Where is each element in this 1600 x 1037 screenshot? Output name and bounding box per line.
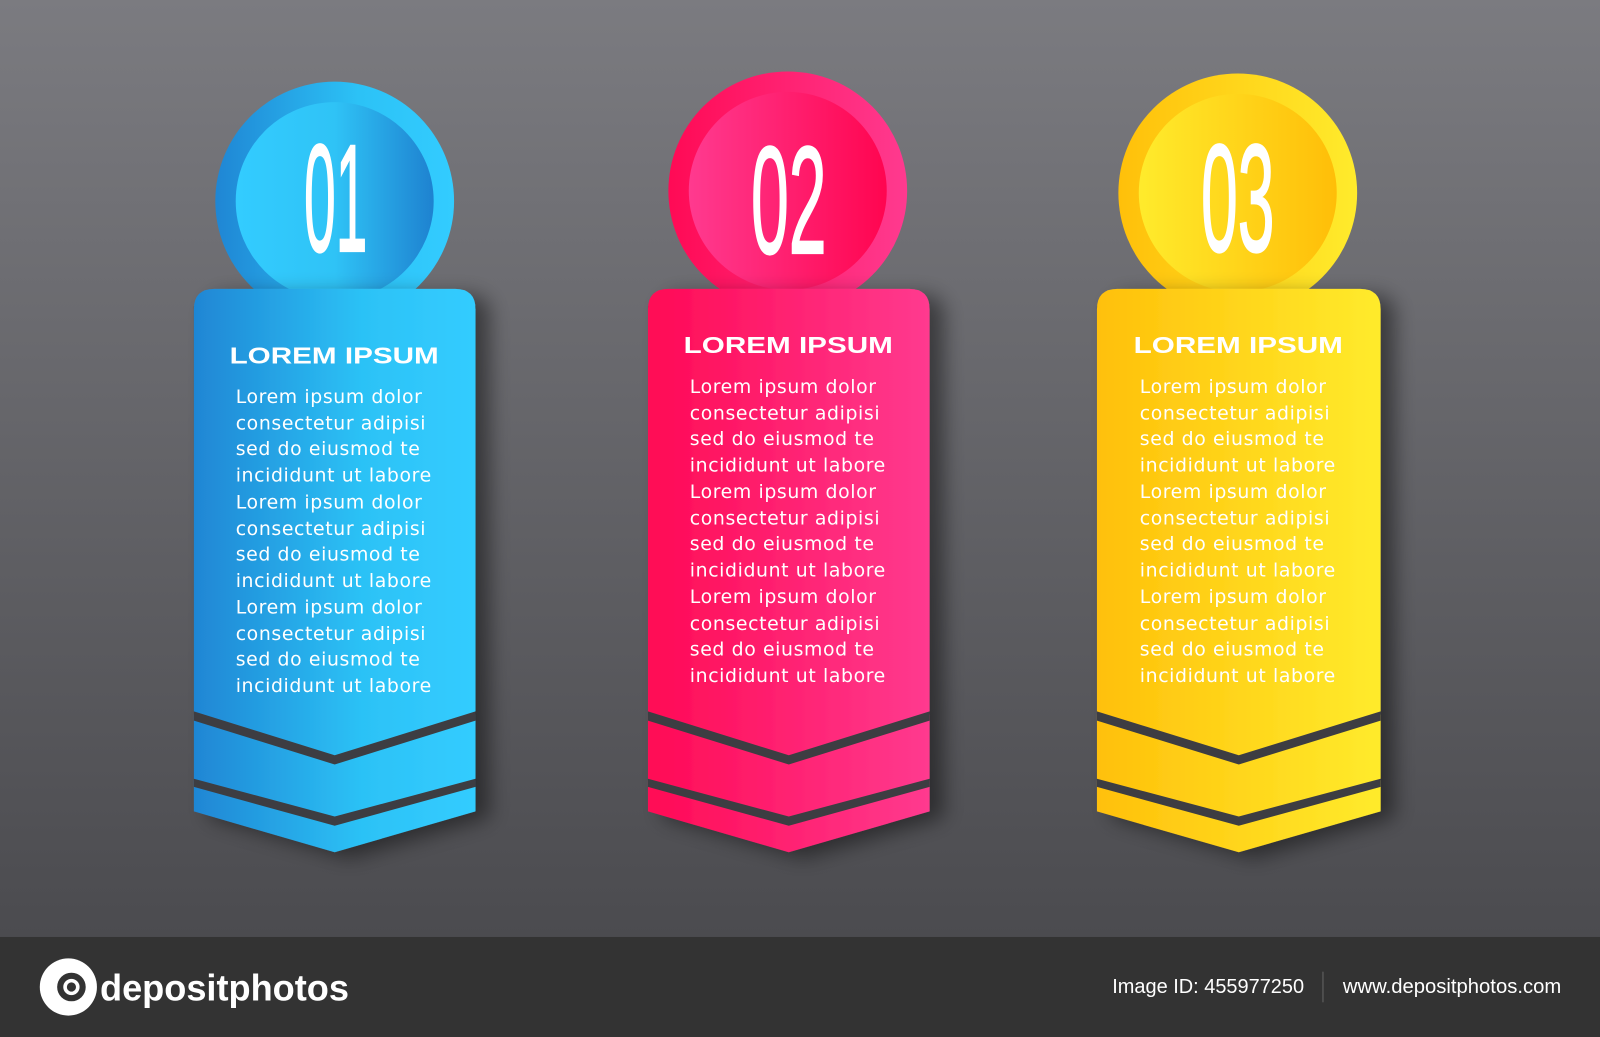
circle 01 xyxy=(215,82,454,320)
circle 03 xyxy=(1118,73,1357,312)
panel: step 01 xyxy=(194,82,476,852)
body text 02: incididunt ut labore xyxy=(690,665,886,687)
logo text: depositphotos xyxy=(100,967,349,1008)
body text 02: sed do eiusmod te xyxy=(690,638,875,660)
website: www.depositphotos.com xyxy=(1342,976,1561,998)
title 01: LOREM IPSUM xyxy=(230,342,439,368)
body text 03: sed do eiusmod te xyxy=(1140,638,1325,660)
body text 03: sed do eiusmod te xyxy=(1140,428,1325,450)
body text 02: consectetur adipisi xyxy=(690,508,880,530)
body text 03: Lorem ipsum dolor xyxy=(1140,376,1327,398)
body text 02: consectetur adipisi xyxy=(690,402,880,424)
body text 01: Lorem ipsum dolor xyxy=(236,491,423,513)
body text 03: incididunt ut labore xyxy=(1140,455,1336,477)
image id: Image ID: 455977250 xyxy=(1112,976,1304,998)
icon: camera logo xyxy=(40,958,97,1016)
panel: step 02: 02 xyxy=(751,115,827,286)
body text 02: incididunt ut labore xyxy=(690,560,886,582)
body text 02: Lorem ipsum dolor xyxy=(690,586,877,608)
body text 02: sed do eiusmod te xyxy=(690,428,875,450)
title 02: LOREM IPSUM xyxy=(684,332,893,358)
body text 03: incididunt ut labore xyxy=(1140,560,1336,582)
body text 01: incididunt ut labore xyxy=(236,465,432,487)
circle 02 xyxy=(668,71,907,310)
body text 01: sed do eiusmod te xyxy=(236,543,421,565)
body text 01: consectetur adipisi xyxy=(236,623,426,645)
body text 03: consectetur adipisi xyxy=(1140,402,1330,424)
body text 03 xyxy=(1140,376,1336,687)
body text 01: consectetur adipisi xyxy=(236,518,426,540)
body text 01: Lorem ipsum dolor xyxy=(236,386,423,408)
panel: step 03: 03 xyxy=(1201,113,1274,284)
body text 02: Lorem ipsum dolor xyxy=(690,481,877,503)
footer bar xyxy=(0,937,1600,1037)
panel: step 01: 01 xyxy=(304,113,367,284)
body text 02: Lorem ipsum dolor xyxy=(690,376,877,398)
body text 02 xyxy=(690,376,886,687)
body text 01: incididunt ut labore xyxy=(236,570,432,592)
body text 03: consectetur adipisi xyxy=(1140,508,1330,530)
body text 02: sed do eiusmod te xyxy=(690,533,875,555)
body text 01 xyxy=(236,386,432,697)
chevron layers 03 xyxy=(1097,289,1381,852)
body text 02: incididunt ut labore xyxy=(690,455,886,477)
body text 01: Lorem ipsum dolor xyxy=(236,596,423,618)
panel: step 02 xyxy=(648,71,930,852)
body text 03: incididunt ut labore xyxy=(1140,665,1336,687)
chevron layers 02 xyxy=(648,289,930,852)
body text 01: consectetur adipisi xyxy=(236,413,426,435)
body text 03: sed do eiusmod te xyxy=(1140,533,1325,555)
body text 01: sed do eiusmod te xyxy=(236,438,421,460)
panel: step 03 xyxy=(1097,73,1381,852)
body text 03: Lorem ipsum dolor xyxy=(1140,586,1327,608)
chevron layers 01 xyxy=(194,289,476,852)
body text 01: sed do eiusmod te xyxy=(236,648,421,670)
body text 02: consectetur adipisi xyxy=(690,613,880,635)
body text 03: Lorem ipsum dolor xyxy=(1140,481,1327,503)
body text 01: incididunt ut labore xyxy=(236,675,432,697)
title 03: LOREM IPSUM xyxy=(1134,332,1343,358)
body text 03: consectetur adipisi xyxy=(1140,613,1330,635)
